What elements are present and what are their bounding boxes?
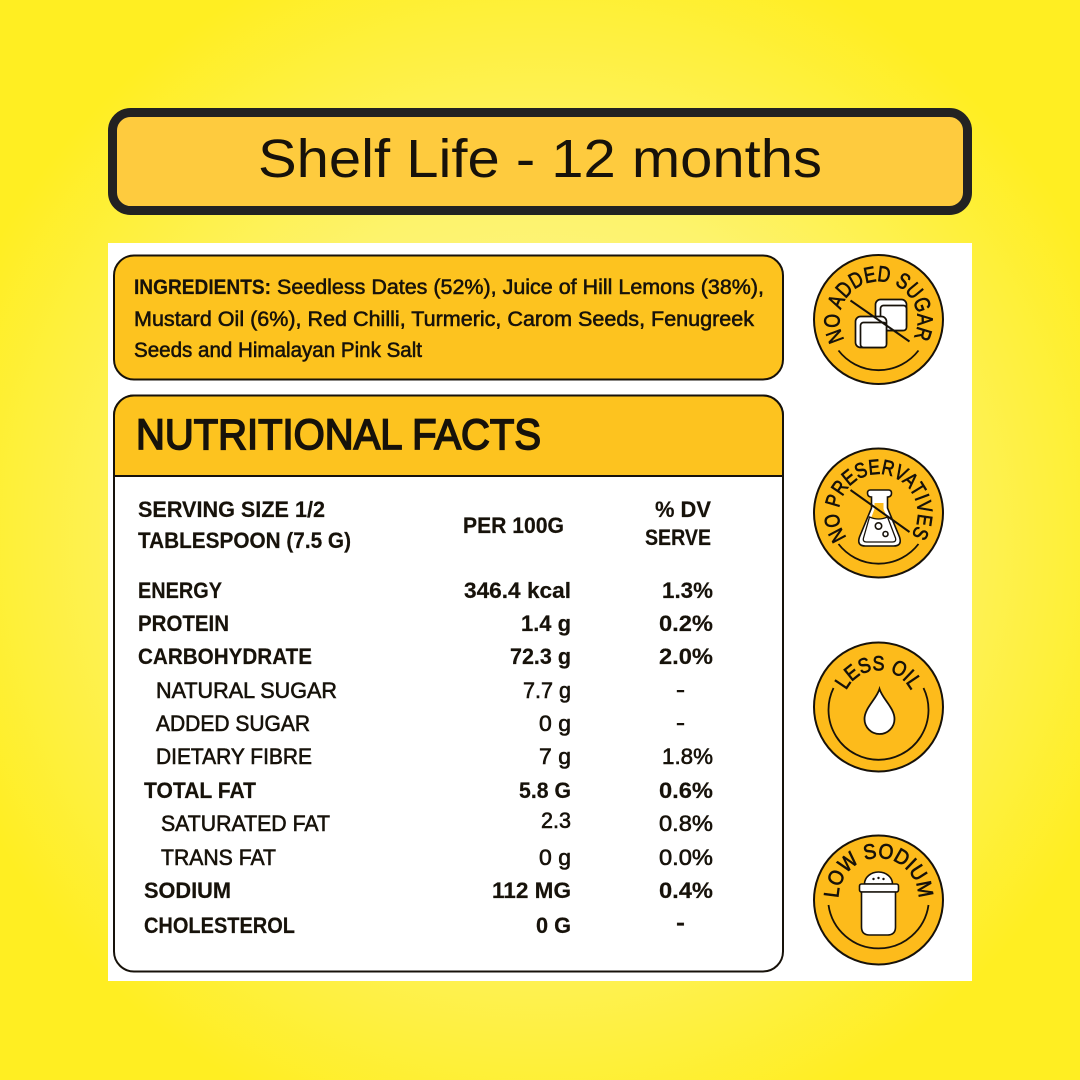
badge: no preservatives: [813, 448, 944, 578]
nutrient rows: 0.4%: [659, 878, 713, 903]
nutrient rows: TOTAL FAT: [144, 778, 257, 803]
white content panel: [108, 243, 972, 981]
nutrient rows: 346.4 kcal: [464, 578, 571, 603]
nutrient rows: 72.3 g: [510, 644, 571, 669]
table header: SERVING SIZE 1/2: [138, 497, 325, 522]
icon: salt shaker: [860, 872, 898, 935]
panel: ingredients: Seeds and Himalayan Pink Salt: [134, 339, 422, 362]
nutrient rows: 0.2%: [659, 611, 713, 636]
nutrient rows: SATURATED FAT: [161, 811, 330, 836]
nutrient rows: -: [676, 910, 685, 935]
badge: less oil: LESS OIL: [834, 656, 920, 690]
nutrient rows: 7 g: [539, 744, 571, 769]
nutrient rows: 1.8%: [662, 744, 713, 769]
nutrient rows: ADDED SUGAR: [156, 711, 310, 736]
icon: oil drop: [864, 689, 894, 734]
nutrient rows: [138, 578, 713, 938]
icon: sugar cubes: [850, 300, 910, 348]
nutrient rows: NATURAL SUGAR: [156, 678, 337, 703]
nutrient rows: ENERGY: [138, 578, 222, 603]
badge: no added sugar: NO ADDED SUGAR: [824, 266, 933, 344]
badge: less oil: [813, 642, 944, 772]
nutrient rows: SODIUM: [144, 878, 231, 903]
panel: ingredients: Seedless Dates (52%), Juice of Hill Lemons (38%),: [277, 276, 764, 299]
nutrient rows: DIETARY FIBRE: [156, 744, 312, 769]
panel: ingredients: [114, 256, 783, 380]
nutrient rows: 2.3: [541, 808, 571, 833]
nutrient rows: CARBOHYDRATE: [138, 644, 312, 669]
nutrient rows: 0 g: [539, 711, 571, 736]
nutrient rows: 7.7 g: [523, 678, 571, 703]
table header: % DV: [655, 497, 711, 522]
nutrient rows: CHOLESTEROL: [144, 913, 295, 938]
nutrient rows: 112 MG: [492, 878, 571, 903]
icon: flask: [850, 490, 910, 546]
title banner: Shelf Life - 12 months: [258, 129, 822, 189]
table header: PER 100G: [463, 513, 564, 538]
badge: low sodium: LOW SODIUM: [824, 844, 934, 897]
nutrient rows: -: [676, 710, 685, 735]
nutrient rows: 0.6%: [659, 778, 713, 803]
nutrition heading: [114, 396, 783, 476]
badge: low sodium: [813, 834, 944, 966]
title banner: [112, 112, 968, 210]
nutrition heading: NUTRITIONAL FACTS: [136, 411, 541, 459]
nutrient rows: 0 G: [536, 913, 571, 938]
nutrient rows: 1.4 g: [521, 611, 571, 636]
nutrient rows: 1.3%: [662, 578, 713, 603]
nutrient rows: 5.8 G: [519, 778, 571, 803]
badge: no added sugar: [813, 254, 944, 385]
nutrient rows: PROTEIN: [138, 611, 229, 636]
badge: no preservatives: NO PRESERVATIVES: [824, 459, 933, 544]
nutrient rows: 0.0%: [659, 845, 713, 870]
table header: [138, 497, 711, 553]
nutrient rows: 0 g: [539, 845, 571, 870]
table header: SERVE: [645, 525, 711, 550]
nutrient rows: 0.8%: [659, 811, 713, 836]
nutrient rows: -: [676, 677, 685, 702]
nutrient rows: TRANS FAT: [161, 845, 276, 870]
nutrient rows: 2.0%: [659, 644, 713, 669]
panel: nutritional facts: [114, 396, 783, 972]
table header: TABLESPOON (7.5 G): [138, 528, 351, 553]
panel: ingredients: Mustard Oil (6%), Red Chilli, Turmeric, Carom Seeds, Fenugreek: [134, 308, 755, 331]
panel: ingredients: INGREDIENTS:: [134, 276, 271, 299]
